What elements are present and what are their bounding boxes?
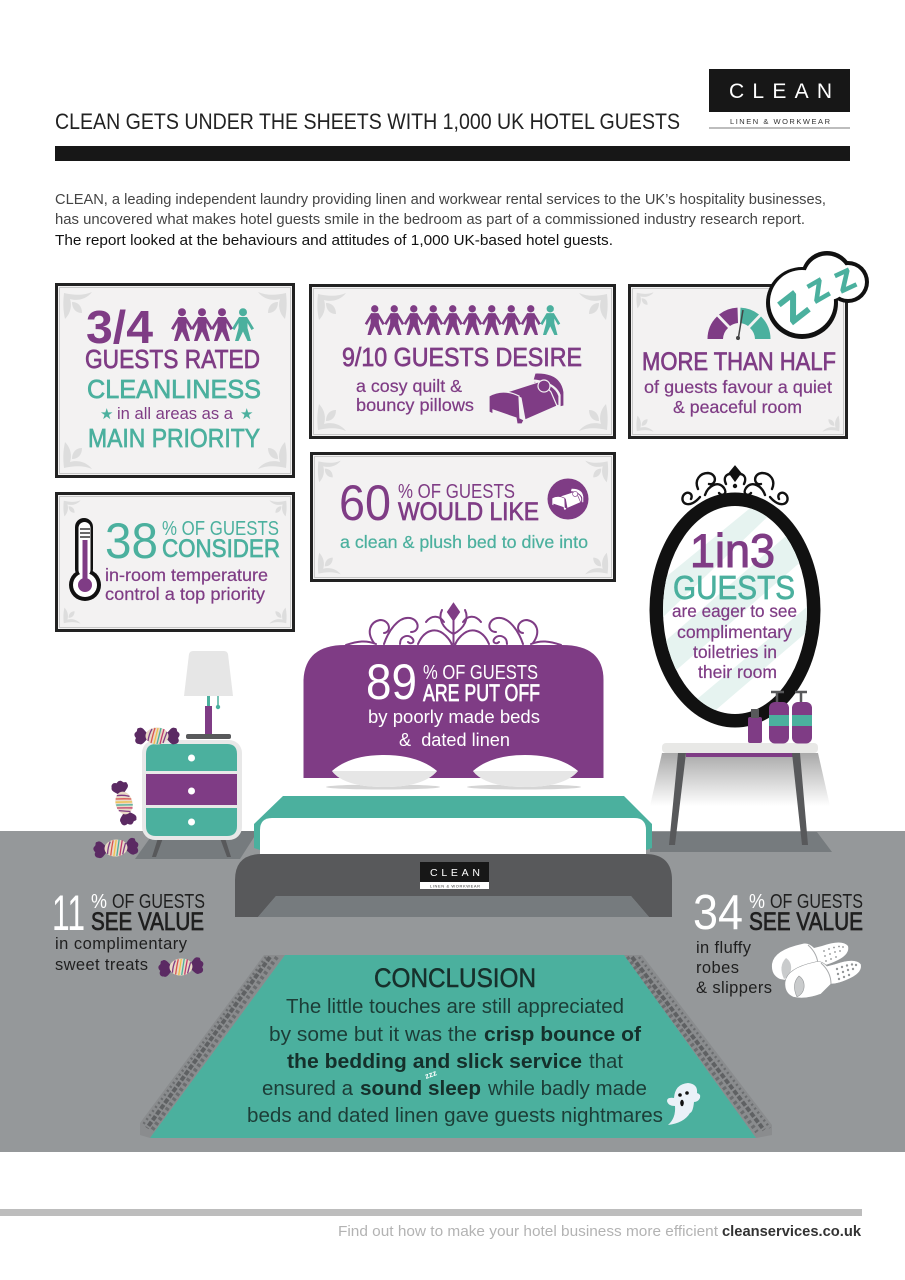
icon: noise gauge [708,308,770,340]
text: in all areas as a: ★ [100,406,113,423]
text: percent of guests would like: % OF GUESTS [398,481,515,503]
panel: 38 percent temperature [56,494,294,630]
stat block: 34 percent robes and slippers [693,886,863,998]
text: in-room temperature control: control a top priority [105,584,265,604]
text: in fluffy robes and slippers [696,939,772,997]
text: percent of guests see value: SEE VALUE [91,908,204,936]
mirror [650,467,820,728]
stat: 60: 60 [339,475,391,531]
text: conclusion body: ensured a [262,1077,354,1100]
panel: 9 in 10 desire quilt and pillows [310,286,614,438]
text: are eager to see complimentary toiletries: complimentary [677,622,792,642]
icon: bed [489,373,564,424]
text: are eager to see complimentary toiletries: are eager to see [672,601,797,621]
icon: four people [171,308,254,341]
text: in fluffy robes and slippers: robes [696,959,739,977]
icon: small zzz: zzz [424,1068,438,1081]
text: percent of guests are put off: % OF GUESTS [423,662,538,684]
toiletry bottles [748,692,812,744]
stat: 3/4: 3/4 [86,301,153,353]
text: percent of guests are put off: ARE PUT OFF [423,680,540,707]
icon: ghost [667,1083,700,1125]
text: in complimentary sweet treats: sweet treats [55,956,148,974]
heading: 9/10 guests desire: 9/10 GUESTS DESIRE [342,342,582,372]
panel: more than half quiet room [630,286,846,438]
stat: 89: 89 [366,654,417,710]
text: percent of guests are put off [423,662,540,707]
text: conclusion body: while badly made [487,1077,647,1100]
text: percent of guests see value: OF GUESTS [770,891,863,913]
bed [235,796,672,917]
text: are eager to see complimentary toiletries [672,601,797,682]
icon: sweet [158,957,204,977]
intro text [55,191,826,249]
text: a cosy quilt and bouncy pillows: bouncy pillows [356,395,474,415]
rug [140,955,772,1138]
text: a clean and plush bed: a clean & plush bed to dive into [340,532,588,552]
logo on bed: CLEAN [430,867,480,879]
pillows [326,755,581,790]
icon: slippers [772,942,861,998]
heading: guests: GUESTS [673,569,795,606]
icon: bed in circle [548,478,588,520]
text: percent of guests see value: % [749,891,765,913]
text: by poorly made beds and dated linen: by poorly made beds [368,706,540,727]
text: in all areas as a: in all areas as a [117,404,234,423]
text: conclusion body: the bedding and slick service [287,1050,582,1073]
text: conclusion body: beds and dated linen gave guests nightmares [247,1104,663,1127]
lamp [184,651,233,739]
intro text: has uncovered what makes hotel guests smile in the bedroom as part of a commissioned industry research report. [55,211,805,228]
text: percent of guests consider [162,518,280,563]
text: in all areas as a: ★ [240,406,253,423]
icon: zzz speech cloud: Z [831,263,860,300]
intro text: CLEAN, a leading independent laundry providing linen and workwear rental services to the UK’s hospitality businesses, [55,191,826,208]
stat: 38: 38 [105,513,158,569]
text: of guests favour a quiet room: of guests favour a quiet [644,377,832,397]
text: in-room temperature control: in-room temperature [105,565,268,585]
icon: zzz speech cloud [766,251,869,339]
text: of guests favour a quiet room [644,377,832,417]
floor shadows [135,831,832,859]
dressing table [650,743,830,845]
icon: sweets by the nightstand [93,728,180,859]
title: CLEAN GETS UNDER THE SHEETS WITH 1,000 UK HOTEL GUESTS [55,109,680,134]
text: in complimentary sweet treats [55,935,188,974]
text: percent of guests consider: CONSIDER [162,535,280,563]
text: percent of guests consider: % OF GUESTS [162,518,279,540]
text: conclusion body: sound sleep [360,1077,481,1100]
stat: 1 in 3: 1in3 [690,524,775,577]
text: percent of guests see value: % [91,891,107,913]
text: of guests favour a quiet room: & peaceful room [673,397,802,417]
heading: guests rated: GUESTS RATED [85,344,260,374]
logo: CLEAN linen and workwear: LINEN & WORKWEAR [730,117,831,126]
headboard [304,604,604,778]
heading: more than half: MORE THAN HALF [642,348,836,376]
text: conclusion body: that [589,1050,623,1073]
footer bar [0,1209,862,1216]
text: percent of guests see value: OF GUESTS [112,891,205,913]
text: percent of guests see value: SEE VALUE [749,908,863,936]
panel: three quarters rate cleanliness [56,284,294,476]
heading: cleanliness: CLEANLINESS [87,374,261,404]
text: in-room temperature control [105,565,268,604]
text: are eager to see complimentary toiletries: toiletries in [693,642,777,662]
text: a cosy quilt and bouncy pillows [356,376,474,415]
text: percent of guests would like [398,481,539,526]
logo: CLEAN linen and workwear: CLEAN [729,80,832,103]
text: in complimentary sweet treats: in complimentary [55,935,188,953]
logo: CLEAN linen and workwear [709,69,850,129]
icon: zzz speech cloud: Z [803,273,834,310]
intro text: The report looked at the behaviours and attitudes of 1,000 UK-based hotel guests. [55,232,613,249]
text: conclusion body: crisp bounce of [484,1023,641,1046]
stat block: 11 percent sweet treats [52,885,205,977]
heading: conclusion: CONCLUSION [374,963,536,993]
text: percent of guests see value [749,891,863,936]
nightstand [142,740,242,857]
text: in fluffy robes and slippers: in fluffy [696,939,752,957]
icon: zzz speech cloud: Z [772,285,816,332]
header bar [55,146,850,161]
text: are eager to see complimentary toiletries: their room [698,662,777,682]
text: conclusion body [247,995,663,1127]
stat: 11: 11 [52,885,85,941]
text: by poorly made beds and dated linen: & dated linen [399,729,510,750]
icon: thermometer [69,518,101,601]
floor [0,831,905,1152]
logo on bed [420,862,489,889]
mirror crown ornament [682,467,788,504]
headboard crown ornament [346,604,561,645]
panel: 60 percent clean and plush bed [312,454,614,580]
text: percent of guests would like: WOULD LIKE [398,498,539,526]
footer text: Find out how to make your hotel business more efficient [338,1223,719,1240]
icon: ten people [365,305,560,335]
stat: 34: 34 [693,886,743,940]
logo on bed: LINEN & WORKWEAR [430,884,480,888]
rug fringes [140,955,772,1138]
text: in fluffy robes and slippers: & slippers [696,979,772,997]
text: conclusion body: The little touches are still appreciated [286,995,624,1018]
text: a cosy quilt and bouncy pillows: a cosy quilt & [356,376,462,396]
text: by poorly made beds and dated linen [368,706,540,750]
heading: main priority: MAIN PRIORITY [88,423,260,453]
text: conclusion body: by some but it was the [269,1023,477,1046]
text: percent of guests see value [91,891,205,936]
footer text: cleanservices.co.uk [722,1223,862,1240]
